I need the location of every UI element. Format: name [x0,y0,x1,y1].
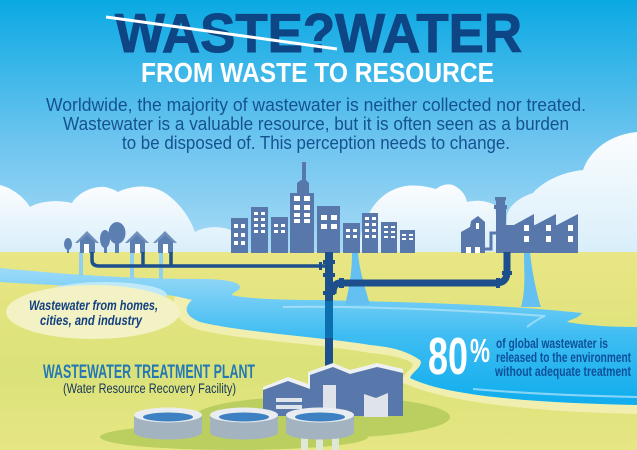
river [0,268,637,405]
clouds [0,132,637,253]
plant heading: WASTEWATER TREATMENT PLANT [43,362,255,383]
title: WASTE?WATER [115,2,522,64]
river highlight behind caption [43,282,167,308]
house 2 [125,231,149,253]
city skyline [231,162,415,253]
cream speech ellipse [6,285,180,339]
house 1 [75,231,99,253]
tank 3 [286,408,354,440]
streams: houses [79,252,163,279]
stream: factory [521,252,541,307]
river bank cream [174,296,637,414]
caption: wastewater from homes: Wastewater from homes, [29,297,158,313]
shadow: far plant base [194,396,450,438]
cloud: left [0,185,235,253]
sky background [0,0,637,253]
pipe: main vertical [319,252,512,366]
caption: wastewater from homes [29,297,158,328]
subtitle: FROM WASTE TO RESOURCE [141,57,494,88]
house 3 [153,231,177,253]
land [0,252,637,450]
factory [461,197,578,253]
houses [75,231,177,253]
streams [345,252,541,307]
settling tanks [134,408,354,440]
cloud: right [505,132,637,253]
effluent pipes [301,437,339,450]
cloud: middle [358,184,500,253]
plant buildings [263,363,403,417]
caption: wastewater from homes: cities, and industry [40,312,143,328]
stat: 80%: % [470,332,490,369]
intro text: to be disposed of. This perception needs to change. [122,132,510,153]
pipe: homes collector [92,252,325,266]
stat description [494,335,631,379]
tank 1 [134,408,202,440]
stream: city [345,252,370,305]
strike line [106,17,337,49]
green ground shadows [100,396,450,450]
intro text: Worldwide, the majority of wastewater is neither collected nor treated. [46,94,586,115]
plant subheading: (Water Resource Recovery Facility) [63,380,236,396]
trees [64,222,126,253]
intro text: Wastewater is a valuable resource, but it is often seen as a burden [63,113,569,134]
pipes [92,252,507,294]
shadow: tanks base [100,424,368,450]
stat: 80%: 80 [428,328,468,386]
intro text [46,94,586,153]
river highlights [283,307,637,397]
pipe: house drops [143,252,171,266]
pipe: factory line [333,252,507,294]
tank 2 [210,408,278,440]
